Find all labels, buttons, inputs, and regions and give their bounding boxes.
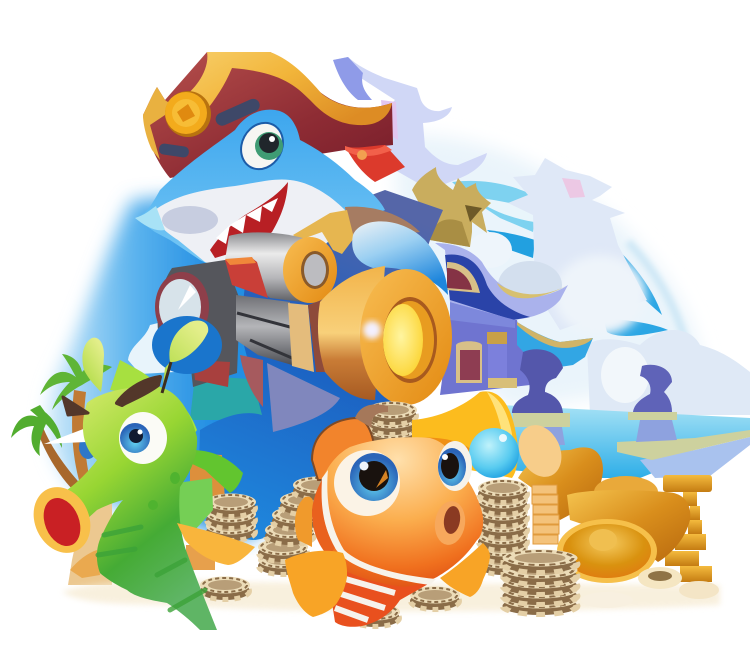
bandana: [345, 145, 405, 182]
ingot two: [567, 490, 690, 562]
brown hook: [355, 404, 388, 428]
scene: clouds and lagoon left of the shark: [128, 320, 262, 420]
body stripes: [98, 527, 205, 610]
hat medallion: [165, 91, 211, 137]
right eye: [438, 441, 472, 491]
cannon: [155, 207, 452, 405]
tail stripes: [330, 560, 430, 627]
upper barrel: [225, 232, 310, 303]
coins: piles behind the characters: [200, 402, 460, 627]
shark: head: [135, 110, 385, 280]
lower barrel: [236, 295, 292, 365]
gold: ingots and stacks: [510, 418, 719, 608]
right fin: [440, 543, 490, 597]
back antenna: [82, 338, 104, 392]
wing fin: [177, 478, 213, 530]
treasure crates behind seahorse: [68, 453, 225, 585]
eye: [119, 412, 167, 464]
small fin: [295, 497, 313, 547]
horn right: [117, 377, 160, 405]
orange fin right: [177, 523, 255, 565]
head: [312, 437, 483, 587]
mouth: [432, 499, 468, 547]
crest: [110, 360, 197, 440]
mouth: [210, 182, 288, 258]
background: blue sky bands and arc: [452, 181, 685, 340]
white stripe: [321, 470, 436, 585]
flat coins: [581, 567, 719, 608]
cannon lens housing: [158, 260, 240, 387]
body and head: [67, 387, 217, 630]
body spots: [148, 472, 180, 510]
front antenna: [162, 320, 208, 393]
pagoda: pale tower right: [508, 158, 647, 335]
background: pale sky wash right: [395, 135, 705, 410]
background: blue sky wash left: [48, 190, 290, 540]
orange fin left: [70, 550, 100, 578]
seahorse: [23, 320, 255, 630]
ingot two dome: [594, 476, 658, 508]
statues: blue dragon statues and pedestals: [512, 349, 677, 427]
dragon: golden dragon on the roof: [412, 167, 491, 247]
cannon shoulder: [352, 221, 448, 295]
clownfish: [285, 404, 490, 627]
shark: blue hand over the cannon: [152, 316, 222, 374]
leaning coin: [510, 418, 570, 484]
muzzle: [360, 269, 452, 405]
pagoda: upper roof behind the hat: [333, 57, 487, 190]
right arm fin: [188, 450, 243, 493]
ingot one: [518, 447, 603, 520]
gold: yellow barrel chest: [412, 391, 518, 478]
pale coin stack: [532, 485, 559, 544]
trumpet mouth: [23, 478, 101, 562]
dorsal fin: [312, 418, 375, 480]
sea: water and platform: [500, 405, 750, 478]
body bar: [312, 480, 335, 556]
horn left: [63, 397, 88, 415]
shark: body: [198, 190, 443, 540]
white spike: [44, 428, 86, 444]
cannon bracket: [345, 207, 420, 240]
right gold stack: [663, 475, 712, 582]
palm trees: [11, 354, 112, 495]
eye: [232, 114, 292, 178]
left fin: [285, 551, 347, 617]
ingot three: [557, 519, 657, 583]
gold barrel: [318, 266, 385, 400]
coin stacks: right front: [478, 480, 578, 615]
pirate hat: [143, 52, 393, 178]
temple: building, roofs and door: [435, 243, 593, 395]
clouds: white and grey clouds: [468, 232, 750, 415]
second seahorse eye behind: [79, 435, 97, 459]
ground: pale sandy shadow: [62, 580, 720, 612]
left eye: [334, 450, 400, 516]
bubble: [469, 428, 519, 478]
